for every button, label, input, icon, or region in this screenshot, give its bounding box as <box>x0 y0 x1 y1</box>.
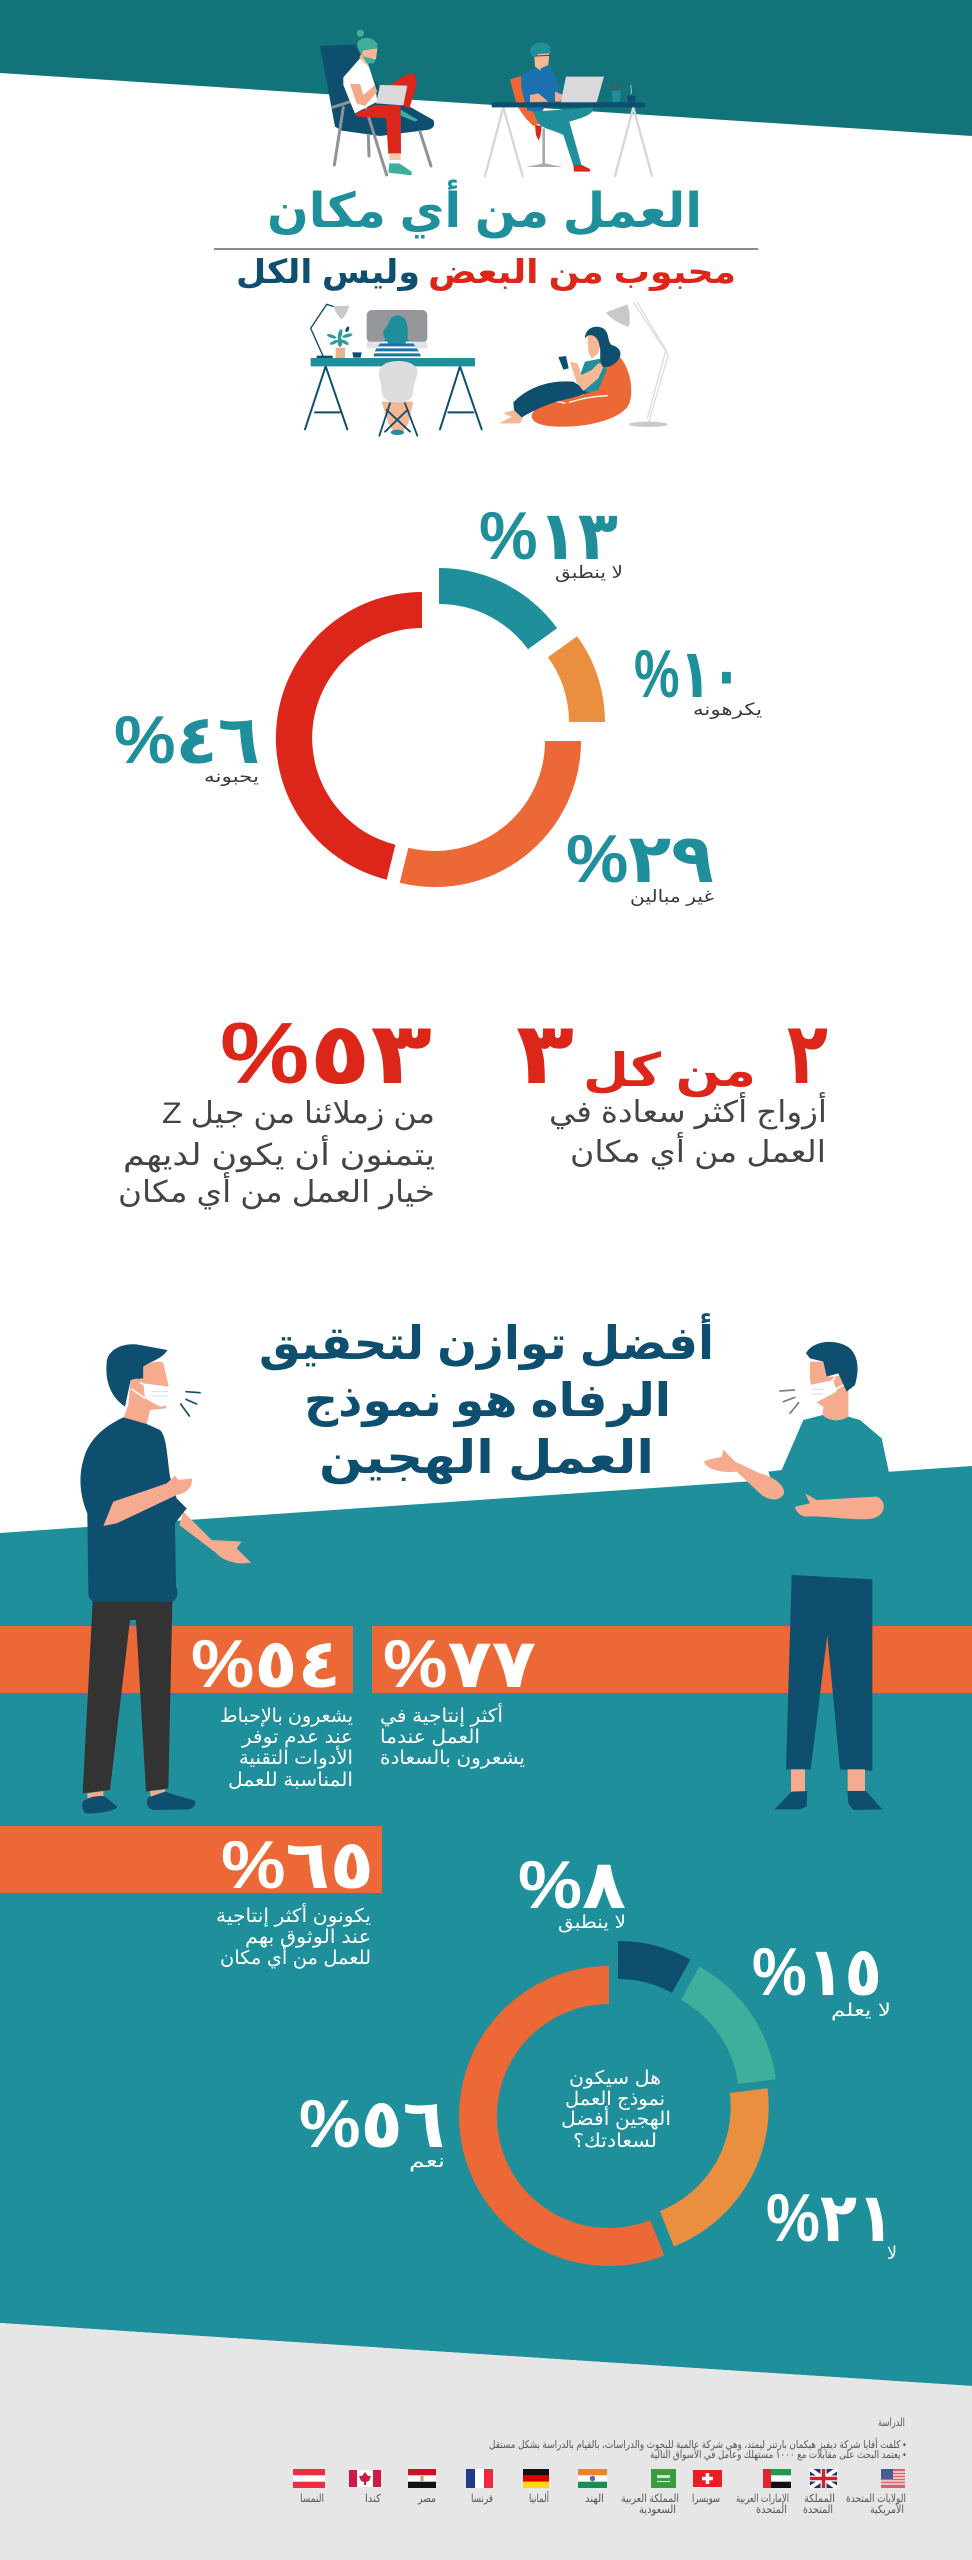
donut centre question: نموذج العمل <box>565 2089 665 2110</box>
stat: 54 percent: يشعرون بالإحباط <box>220 1706 353 1727</box>
stat: 53 percent generation Z: من زملائنا من جيل Z <box>162 1097 435 1130</box>
flag: Canada <box>349 2470 381 2487</box>
footer study notes: • كلفت أفايا شركة ديفيز هيكمان بارتنر ليمتد، وهي شركة عالمية للبحوث والدراسات، بالقيام بالدراسة بشكل مستقل <box>489 2437 906 2451</box>
country labels: مصر <box>417 2493 436 2505</box>
footer study notes: الدراسة <box>878 2417 905 2429</box>
stat: two in three couples: ٢ <box>787 1006 828 1102</box>
segment: dislike 10% <box>548 636 605 722</box>
flag: India <box>578 2469 607 2488</box>
footer study notes: • يعتمد البحث على مقابلات مع ١٠٠٠ مستهلك وعامل في الأسواق التالية <box>650 2448 906 2461</box>
country labels: الإمارات العربية <box>736 2493 789 2505</box>
stat: 54 percent: ٥٤% <box>191 1626 341 1702</box>
subtitle: وليس الكل <box>236 253 420 292</box>
donut centre question: هل سيكون <box>569 2068 661 2089</box>
stat: 21 percent no: ٢١% <box>766 2180 894 2256</box>
stat: 21 percent no: لا <box>887 2243 897 2263</box>
country labels: السعودية <box>639 2504 676 2516</box>
donut centre question: لسعادتك؟ <box>573 2131 657 2152</box>
stat: two in three couples: أزواج أكثر سعادة في <box>549 1091 827 1130</box>
country labels: كندا <box>365 2493 382 2505</box>
title: العمل من أي مكان <box>267 179 702 239</box>
flag: UAE <box>763 2469 791 2488</box>
stat: 77 percent: ٧٧% <box>383 1626 536 1702</box>
donut centre question <box>561 2068 671 2152</box>
stat: 15 percent do not know: لا يعلم <box>831 2000 891 2021</box>
heading: hybrid model: الرفاه هو نموذج <box>304 1374 671 1427</box>
flag: Switzerland <box>693 2470 722 2487</box>
illustration: woman at desk seen from behind <box>305 304 482 436</box>
segment: do not know 15% <box>681 1967 776 2084</box>
stat: two in three couples: من كل <box>583 1044 756 1097</box>
stat: 53 percent generation Z <box>118 1006 435 1209</box>
footer study notes <box>489 2417 906 2461</box>
stat: 65 percent: للعمل من أي مكان <box>220 1945 371 1969</box>
stat: 65 percent: عند الوثوق بهم <box>245 1927 371 1948</box>
stat: 13 percent not applicable: لا ينطبق <box>555 563 623 582</box>
flag: Egypt <box>408 2469 436 2488</box>
country labels: سويسرا <box>692 2493 720 2505</box>
country labels: المتحدة <box>756 2504 787 2516</box>
stat: 10 percent dislike: يكرهونه <box>693 700 762 719</box>
stat: 54 percent: المناسبة للعمل <box>228 1770 353 1791</box>
segment: not applicable 8% <box>618 1941 690 1993</box>
teal section background <box>0 1466 972 2386</box>
country labels: المملكة العربية <box>621 2493 679 2505</box>
segment: love 46% <box>276 592 422 880</box>
illustration: left man with mask <box>80 1344 251 1813</box>
country labels: الهند <box>585 2493 604 2505</box>
country labels: فرنسا <box>471 2493 493 2505</box>
stat: 65 percent: ٦٥% <box>221 1827 374 1903</box>
stat: 8 percent not applicable: لا ينطبق <box>558 1912 626 1933</box>
stat: 77 percent <box>380 1626 536 1769</box>
illustration: man in armchair with laptop <box>320 30 434 175</box>
country labels: الولايات المتحدة <box>846 2493 906 2505</box>
heading: hybrid model: أفضل توازن لتحقيق <box>259 1313 714 1370</box>
stat: 77 percent: يشعرون بالسعادة <box>380 1748 525 1769</box>
donut centre question: الهجين أفضل <box>561 2106 671 2130</box>
country labels: الأمريكية <box>870 2502 904 2516</box>
stat: 46 percent love: يحبونه <box>204 767 259 786</box>
stat: 53 percent generation Z: ٥٣% <box>220 1006 432 1102</box>
subtitle: محبوب من البعض <box>428 253 736 292</box>
top banner <box>0 0 972 136</box>
illustration: right man with mask <box>704 1342 890 1810</box>
orange bar: 77 percent <box>372 1626 972 1693</box>
stat: 56 percent yes: ٥٦% <box>299 2086 445 2162</box>
segment: yes 56% <box>459 1966 664 2266</box>
subtitle <box>236 253 736 292</box>
stat: two in three couples: ٣ <box>516 1006 574 1102</box>
orange bar: 65 percent <box>0 1826 382 1893</box>
country labels: المتحدة <box>803 2504 833 2516</box>
country labels: النمسا <box>300 2493 324 2505</box>
country labels <box>300 2491 906 2516</box>
country labels: المملكة <box>804 2493 835 2505</box>
flag: United Kingdom <box>810 2469 837 2488</box>
footer background <box>0 2323 972 2560</box>
stat: 54 percent <box>191 1626 353 1791</box>
divider line <box>214 248 758 250</box>
segment: indifferent 29% <box>400 741 581 887</box>
stat: 29 percent indifferent: غير مبالين <box>630 887 714 906</box>
flag: United States <box>881 2469 905 2488</box>
stat: 77 percent: أكثر إنتاجية في <box>380 1703 503 1728</box>
stat: 15 percent do not know: ١٥% <box>752 1934 882 2010</box>
flag: Austria <box>293 2469 325 2488</box>
stat: 65 percent <box>216 1827 374 1969</box>
flag: Saudi Arabia <box>651 2469 676 2488</box>
stat: 77 percent: العمل عندما <box>380 1727 480 1748</box>
stat: 53 percent generation Z: يتمنون أن يكون لديهم <box>123 1134 435 1173</box>
donut chart: hybrid happiness question <box>459 1941 776 2266</box>
illustration: man at desk with laptop <box>485 43 652 176</box>
stat: two in three couples <box>516 1006 828 1169</box>
donut chart: feelings about work from anywhere <box>276 568 605 887</box>
stat: 8 percent not applicable: ٨% <box>518 1847 626 1923</box>
stat: 56 percent yes: نعم <box>409 2151 445 2172</box>
stat: 46 percent love: ٤٦% <box>114 702 260 778</box>
illustration: woman on beanbag with phone <box>499 302 668 427</box>
stat: two in three couples: العمل من أي مكان <box>570 1131 826 1169</box>
stat: 65 percent: يكونون أكثر إنتاجية <box>216 1903 371 1928</box>
stat: 29 percent indifferent: ٢٩% <box>566 821 714 897</box>
country labels: ألمانيا <box>529 2491 549 2505</box>
stat: 54 percent: الأدوات التقنية <box>239 1746 353 1769</box>
heading: hybrid model: العمل الهجين <box>319 1431 654 1484</box>
flag: Germany <box>523 2469 549 2488</box>
segment: no 21% <box>660 2088 769 2246</box>
segment: not applicable 13% <box>439 568 557 649</box>
orange bar: 54 percent <box>0 1626 353 1693</box>
heading: hybrid model <box>259 1313 714 1484</box>
flag: France <box>466 2469 493 2488</box>
stat: 54 percent: عند عدم توفر <box>241 1727 353 1748</box>
stat: 10 percent dislike: ١٠% <box>634 636 742 712</box>
stat: 13 percent not applicable: ١٣% <box>479 498 618 574</box>
stat: 53 percent generation Z: خيار العمل من أي مكان <box>118 1171 435 1209</box>
